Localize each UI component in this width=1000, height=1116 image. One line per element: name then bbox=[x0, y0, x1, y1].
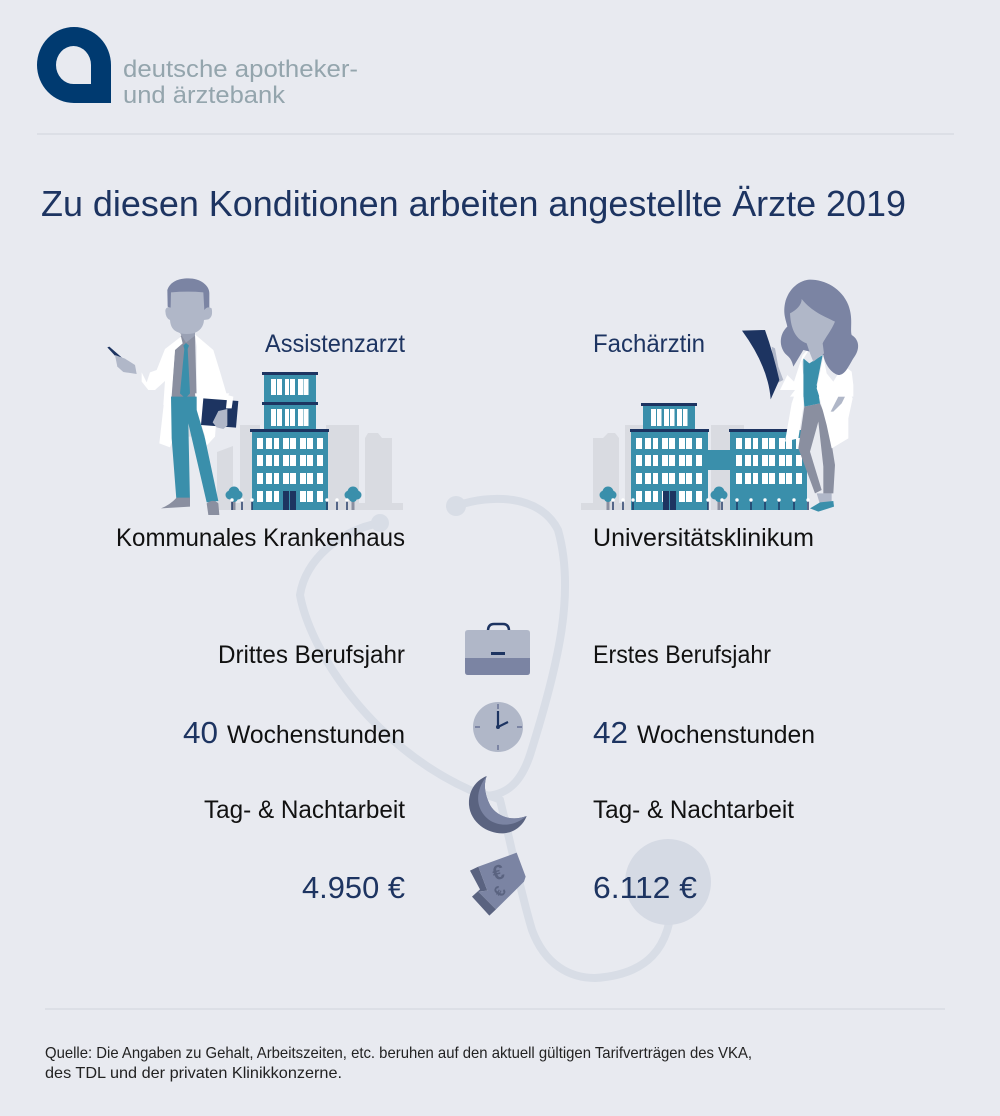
employer: Kommunales Krankenhaus: Kommunales Krankenhaus bbox=[116, 524, 405, 552]
icon: clock bbox=[473, 702, 523, 752]
title: Zu diesen Konditionen arbeiten angestellte Ärzte 2019 bbox=[41, 183, 906, 224]
icon: banknotes bbox=[470, 853, 526, 916]
row: Arbeitszeit: Tag- & Nachtarbeit bbox=[593, 796, 794, 824]
employer: Universitätsklinikum: Universitätsklinikum bbox=[593, 524, 814, 552]
column labels bbox=[116, 330, 814, 552]
icon: briefcase bbox=[465, 624, 530, 675]
role: Fachärztin: Fachärztin bbox=[593, 330, 705, 358]
row: Berufsjahr: Erstes Berufsjahr bbox=[593, 641, 771, 669]
row: Wochenstunden: Wochenstunden bbox=[227, 721, 405, 749]
icon: banknotes: € bbox=[491, 884, 510, 900]
source note: Quelle: Die Angaben zu Gehalt, Arbeitszeiten, etc. beruhen auf den aktuell gültigen Tarifverträgen des VKA, bbox=[45, 1045, 752, 1062]
row: Arbeitszeit bbox=[204, 776, 794, 833]
icon: moon bbox=[469, 776, 527, 833]
logo wordmark: und ärztebank bbox=[123, 82, 286, 109]
row: Gehalt: 6.112 € bbox=[593, 870, 697, 905]
row: Berufsjahr bbox=[218, 624, 771, 675]
icon: banknotes: € bbox=[490, 860, 507, 885]
row: Gehalt: 4.950 € bbox=[302, 870, 405, 905]
logo bbox=[37, 27, 358, 109]
row: Wochenstunden: 42 bbox=[593, 715, 628, 750]
row: Wochenstunden: 40 bbox=[183, 715, 218, 750]
row: Arbeitszeit: Tag- & Nachtarbeit bbox=[204, 796, 405, 824]
logo mark bbox=[37, 27, 111, 103]
logo wordmark: deutsche apotheker- bbox=[123, 56, 358, 83]
logo wordmark bbox=[123, 56, 358, 109]
row: Wochenstunden: Wochenstunden bbox=[637, 721, 815, 749]
illustration: male doctor bbox=[107, 278, 238, 515]
illustration: female doctor bbox=[742, 280, 858, 512]
illustration: Universitätsklinikum building bbox=[581, 403, 810, 510]
illustration: Kommunales Krankenhaus building bbox=[217, 372, 403, 510]
source note: des TDL und der privaten Klinikkonzerne. bbox=[45, 1065, 342, 1082]
row: Berufsjahr: Drittes Berufsjahr bbox=[218, 641, 405, 669]
role: Assistenzarzt: Assistenzarzt bbox=[265, 330, 405, 358]
source note bbox=[45, 1045, 752, 1082]
row: Wochenstunden bbox=[183, 702, 815, 752]
stethoscope background bbox=[300, 496, 711, 978]
row: Gehalt bbox=[302, 853, 697, 916]
